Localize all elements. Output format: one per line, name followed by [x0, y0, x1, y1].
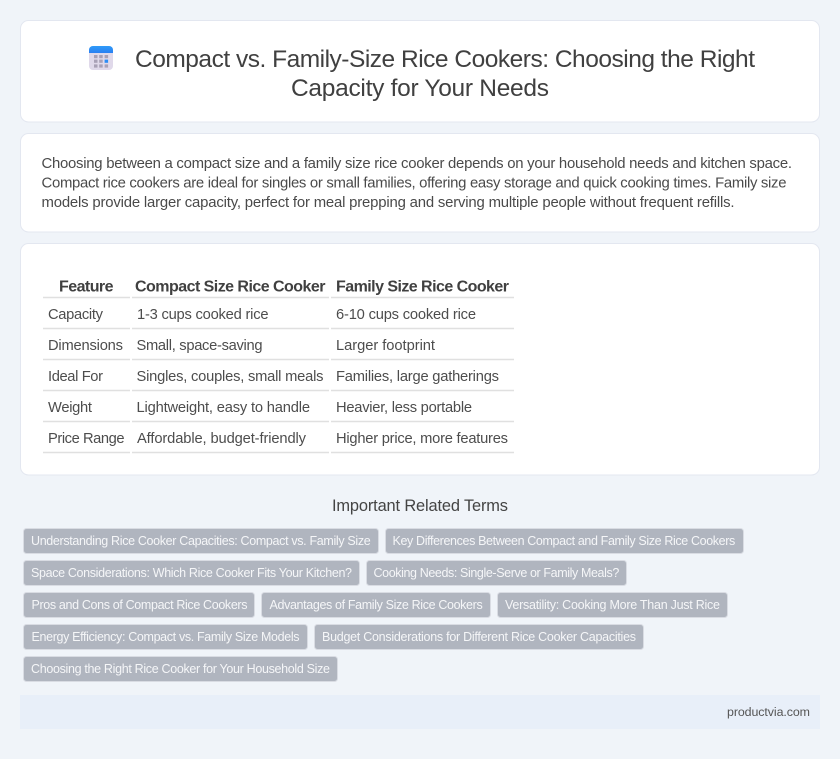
row: ideal for	[48, 369, 499, 385]
title text: Compact vs. Family-Size Rice Cookers: Choosing the Right	[135, 46, 755, 73]
row: capacity: Capacity	[48, 307, 104, 323]
row: capacity: 6-10 cups cooked rice	[336, 307, 476, 323]
icon: calendar	[89, 46, 113, 70]
related term tags	[24, 528, 744, 682]
row: weight: Weight	[48, 400, 92, 416]
row: ideal for: Families, large gatherings	[336, 369, 499, 385]
introduction text	[42, 156, 792, 211]
row: dimensions: Small, space-saving	[136, 338, 262, 354]
tag: Energy Efficiency: Compact vs. Family Size Models	[32, 630, 300, 644]
row: weight: Lightweight, easy to handle	[136, 400, 310, 416]
row: capacity	[48, 307, 476, 323]
row: ideal for: Ideal For	[48, 369, 103, 385]
introduction text: Choosing between a compact size and a family size rice cooker depends on your household needs and kitchen space.	[42, 156, 792, 172]
row: capacity: 1-3 cups cooked rice	[137, 307, 268, 323]
row: ideal for: Singles, couples, small meals	[136, 369, 324, 385]
row: weight: Heavier, less portable	[336, 400, 472, 416]
tag	[24, 624, 308, 650]
row: dimensions	[48, 338, 435, 354]
tag: Cooking Needs: Single-Serve or Family Meals?	[374, 566, 619, 580]
tag	[314, 624, 644, 650]
table header	[59, 278, 509, 296]
row: price range: Price Range	[48, 431, 124, 447]
tag: Understanding Rice Cooker Capacities: Compact vs. Family Size	[31, 534, 371, 548]
tag: Budget Considerations for Different Rice Cooker Capacities	[322, 630, 636, 644]
panel: comparison table	[20, 244, 820, 475]
table header: Family Size Rice Cooker	[336, 278, 509, 296]
panel: introduction	[20, 134, 820, 232]
heading: related terms: Important Related Terms	[332, 497, 508, 515]
tag: Advantages of Family Size Rice Cookers	[270, 598, 483, 612]
tag	[24, 528, 378, 554]
title text: Capacity for Your Needs	[291, 75, 549, 102]
table header: Feature	[59, 278, 114, 296]
row: price range	[48, 431, 508, 447]
tag	[24, 560, 360, 586]
tag	[386, 528, 744, 554]
tag: Choosing the Right Rice Cooker for Your Household Size	[31, 662, 330, 676]
row: price range: Affordable, budget-friendly	[137, 431, 307, 447]
title text	[135, 46, 755, 102]
tag	[498, 592, 728, 618]
table header: Compact Size Rice Cooker	[135, 278, 326, 296]
footer	[20, 695, 820, 729]
introduction text: Compact rice cookers are ideal for singles or small families, offering easy storage and quick cooking times. Family size	[42, 176, 786, 192]
tag	[24, 656, 338, 682]
row: price range: Higher price, more features	[336, 431, 508, 447]
tag	[24, 592, 254, 618]
footer: productvia.com	[727, 705, 810, 719]
tag: Space Considerations: Which Rice Cooker Fits Your Kitchen?	[31, 566, 352, 580]
tag: Key Differences Between Compact and Family Size Rice Cookers	[392, 534, 735, 548]
row: dimensions: Larger footprint	[336, 338, 435, 354]
tag: Versatility: Cooking More Than Just Rice	[505, 598, 720, 612]
tag	[262, 592, 490, 618]
panel: title	[20, 20, 820, 122]
tag	[366, 560, 626, 586]
row: weight	[48, 400, 472, 416]
tag: Pros and Cons of Compact Rice Cookers	[32, 598, 248, 612]
introduction text: models provide larger capacity, perfect for meal prepping and serving multiple people without frequent refills.	[42, 195, 734, 211]
row: dimensions: Dimensions	[48, 338, 123, 354]
